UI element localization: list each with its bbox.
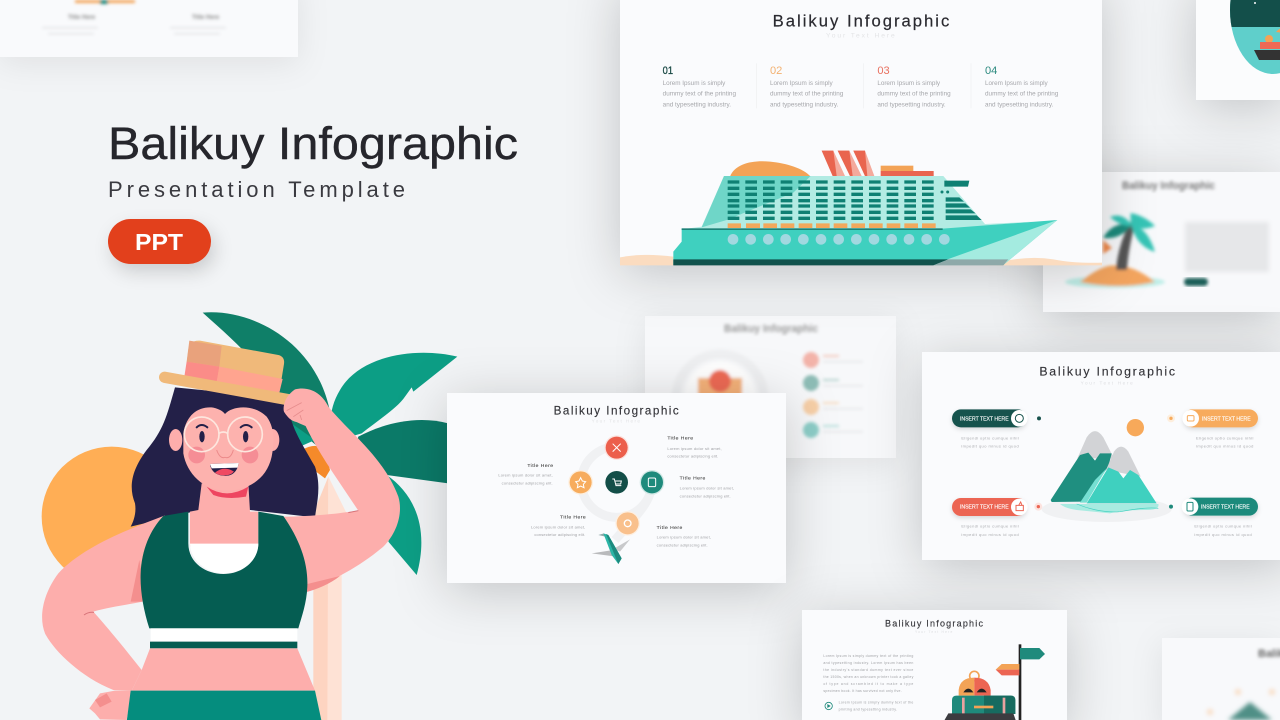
main subtitle: Presentation Template xyxy=(108,177,405,202)
cabin windows xyxy=(728,180,982,220)
node: cart xyxy=(605,471,628,494)
text: top left: Eligendi optio cumque nihil xyxy=(961,435,1019,440)
white waistband xyxy=(151,628,297,641)
column 01: 01 xyxy=(663,65,673,77)
circle slide subtitle: Your Text Here xyxy=(592,418,640,423)
column 04: 04 xyxy=(985,65,997,77)
pill: top right xyxy=(1167,409,1258,427)
funnels xyxy=(822,151,874,176)
oval night sea scene xyxy=(1230,0,1280,74)
superstructure xyxy=(682,176,1033,229)
text: bottom left: impedit quo minus id quod xyxy=(961,532,1019,537)
hair xyxy=(131,387,318,527)
pill: top right: INSERT TEXT HERE xyxy=(1202,416,1251,422)
mouth xyxy=(210,463,239,476)
column 02: and typesetting industry. xyxy=(770,101,839,108)
label: bottom right xyxy=(657,525,711,547)
slide card: bottom right, blurred xyxy=(1162,638,1280,720)
luggage slide subtitle: Your Text Here xyxy=(915,630,952,634)
label: left: Lorem ipsum dolor sit amet, xyxy=(498,473,553,478)
node: peach xyxy=(615,511,640,536)
column 02 xyxy=(770,65,844,108)
label: bottom left: Lorem ipsum dolor sit amet, xyxy=(531,524,585,529)
column 03 xyxy=(877,65,951,108)
label: right: consectetur adipiscing elit. xyxy=(680,493,731,498)
signpost xyxy=(996,644,1045,720)
pill: bottom right: INSERT TEXT HERE xyxy=(1201,505,1250,511)
text: top right xyxy=(1196,435,1253,449)
raised right arm xyxy=(283,389,400,592)
paragraph: the industry's standard dummy text ever since xyxy=(823,668,913,672)
label: bottom right: Title Here xyxy=(657,525,683,531)
column 03: and typesetting industry. xyxy=(877,101,946,108)
balcony row xyxy=(728,223,936,228)
island text block xyxy=(1185,222,1269,272)
main title: Balikuy Infographic xyxy=(108,118,518,169)
list text xyxy=(839,701,913,712)
palm trunk xyxy=(313,477,347,720)
label: bottom right: Lorem ipsum dolor sit amet, xyxy=(657,535,711,540)
cruise slide subtitle: Your Text Here xyxy=(826,33,895,40)
text: top right: impedit quo minus id quod xyxy=(1196,444,1253,449)
text: bottom right: impedit quo minus id quod xyxy=(1194,532,1252,537)
pill: bottom left xyxy=(952,498,1042,516)
column 01 xyxy=(663,65,736,108)
slide card: cruise ship xyxy=(620,0,1102,265)
list text: printing and typesetting industry. xyxy=(839,708,897,712)
column 04 xyxy=(985,65,1059,108)
island button xyxy=(1184,278,1208,286)
label: top right: Title Here xyxy=(667,436,693,442)
PPT badge xyxy=(108,219,211,264)
paragraph: the 1500s, when an unknown printer took a galley xyxy=(823,675,914,679)
pill: bottom left: INSERT TEXT HERE xyxy=(960,505,1009,511)
eyes and brows xyxy=(197,425,252,442)
suitcases xyxy=(944,696,1016,720)
PPT badge: PPT xyxy=(135,229,183,255)
list icon xyxy=(825,702,832,710)
column 02: 02 xyxy=(770,65,782,77)
portholes xyxy=(728,234,950,245)
backpack xyxy=(959,671,991,696)
crop top xyxy=(141,512,307,628)
sand waves xyxy=(620,255,1102,265)
column 02: dummy text of the printing xyxy=(770,91,844,98)
slide card: island, blurred xyxy=(1043,172,1280,312)
shorts xyxy=(127,691,322,720)
left arm on hip xyxy=(42,515,165,691)
mountain slide subtitle: Your Text Here xyxy=(1081,380,1133,385)
plate list markers xyxy=(803,352,863,438)
palm leaves xyxy=(203,312,457,575)
column 02: Lorem Ipsum is simply xyxy=(770,80,833,87)
plate slide title: Balikuy Infographic xyxy=(724,323,818,335)
slide card: circular diagram xyxy=(447,393,786,583)
column 01: dummy text of the printing xyxy=(663,91,736,98)
node: red xyxy=(604,435,629,460)
label: top right: Lorem ipsum dolor sit amet, xyxy=(667,446,722,451)
label: left: Title Here xyxy=(527,463,553,469)
label: left xyxy=(498,463,553,485)
ears xyxy=(169,429,182,451)
character illustration xyxy=(42,312,457,720)
hull xyxy=(673,220,1057,265)
nose xyxy=(217,450,233,458)
paragraph: and typesetting industry. Lorem Ipsum has been xyxy=(823,661,913,665)
green waistband xyxy=(150,642,297,648)
column 04: Lorem Ipsum is simply xyxy=(985,80,1048,87)
slide card: top left, blurred: Title Here xyxy=(192,15,220,21)
slide card: mountain xyxy=(922,352,1280,560)
mountains xyxy=(1051,431,1159,513)
label: right: Lorem ipsum dolor sit amet, xyxy=(680,486,734,491)
node: orange xyxy=(568,470,593,495)
slide card: top right with oval scene xyxy=(1196,0,1280,100)
pill: top left xyxy=(952,409,1041,427)
column 03: Lorem Ipsum is simply xyxy=(877,80,941,87)
mountain slide title: Balikuy Infographic xyxy=(1039,365,1175,379)
text: bottom right: Eligendi optio cumque nihil xyxy=(1194,524,1252,529)
slide card: plate, blurred xyxy=(645,316,896,458)
face xyxy=(183,407,273,491)
label: top right xyxy=(667,436,722,458)
cruise slide title: Balikuy Infographic xyxy=(773,12,949,31)
column 01: Lorem Ipsum is simply xyxy=(663,80,726,87)
column 01: and typesetting industry. xyxy=(663,101,731,108)
text: top right: Eligendi optio cumque nihil xyxy=(1196,435,1253,440)
neckline xyxy=(190,544,258,573)
label: bottom right: consectetur adipiscing elit. xyxy=(657,542,708,547)
text: top left: impedit quo minus id quod xyxy=(961,444,1019,449)
hat xyxy=(165,341,290,400)
text: top left xyxy=(961,435,1019,449)
circle slide title: Balikuy Infographic xyxy=(554,404,679,417)
label: right: Title Here xyxy=(680,476,706,482)
island illustration xyxy=(1065,213,1165,288)
slide card: luggage xyxy=(802,610,1067,720)
text: bottom left xyxy=(961,524,1019,537)
belly xyxy=(132,648,315,691)
node: teal xyxy=(640,470,664,495)
upper deck blocks xyxy=(881,166,913,171)
glasses xyxy=(184,417,262,452)
pill: bottom right xyxy=(1169,498,1258,516)
slide card: top left, blurred xyxy=(0,0,298,57)
slide card: top left, blurred: Title Here xyxy=(68,15,96,21)
column 04: and typesetting industry. xyxy=(985,101,1054,108)
coconut xyxy=(302,446,330,478)
plate illustration xyxy=(676,354,764,442)
label: bottom left: Title Here xyxy=(560,515,586,521)
list text: Lorem Ipsum is simply dummy text of the xyxy=(839,701,913,705)
label: left: consectetur adipiscing elit. xyxy=(502,480,553,485)
label: bottom left xyxy=(531,515,586,537)
ground shadow xyxy=(1042,497,1172,522)
sun xyxy=(42,447,182,587)
paragraph: of type and scrambled it to make a type xyxy=(823,682,913,686)
cruise ship illustration xyxy=(673,151,1057,265)
pill: top left: INSERT TEXT HERE xyxy=(960,416,1009,422)
hand on hat xyxy=(284,389,333,428)
column 04: dummy text of the printing xyxy=(985,91,1059,98)
ring path xyxy=(581,447,652,540)
paragraph xyxy=(823,654,914,693)
text: bottom right xyxy=(1194,524,1252,537)
label: bottom left: consectetur adipiscing elit. xyxy=(534,532,585,537)
cheeks xyxy=(188,447,205,463)
luggage slide title: Balikuy Infographic xyxy=(885,618,983,628)
bottom right illustration xyxy=(1207,689,1275,720)
paper plane xyxy=(592,533,630,564)
sun xyxy=(1127,419,1144,436)
chin shadow xyxy=(207,487,248,498)
neck and chest xyxy=(190,483,258,547)
text: bottom left: Eligendi optio cumque nihil xyxy=(961,524,1019,529)
label: top right: consectetur adipiscing elit. xyxy=(667,453,718,458)
column 03: dummy text of the printing xyxy=(877,91,951,98)
label: right xyxy=(680,476,734,498)
island slide title: Balikuy Infographic xyxy=(1122,180,1215,192)
orange hump xyxy=(730,161,811,177)
paragraph: specimen book. It has survived not only five. xyxy=(823,689,902,693)
left hand xyxy=(89,691,132,720)
column 03: 03 xyxy=(877,65,890,77)
paragraph: Lorem Ipsum is simply dummy text of the printing xyxy=(823,654,913,658)
